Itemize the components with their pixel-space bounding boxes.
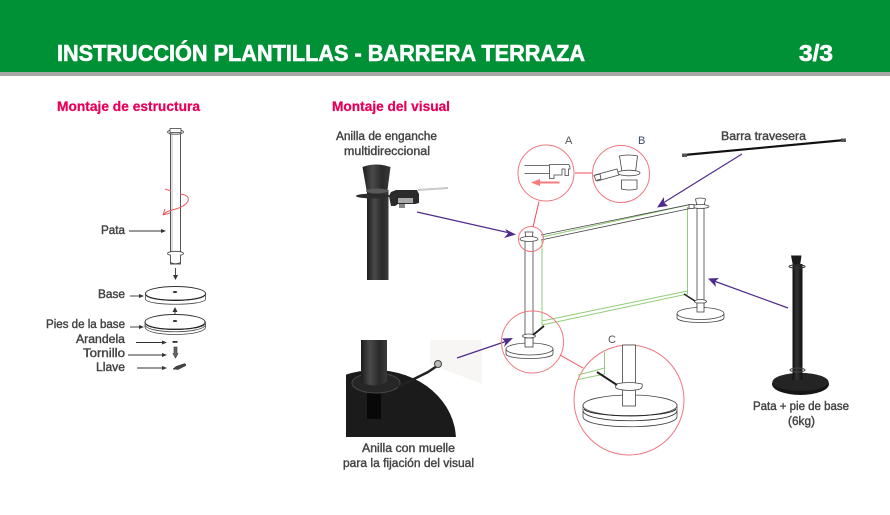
base foot [145, 314, 206, 334]
detail B [592, 135, 650, 202]
label: anilla con muelle: Anilla con muelle [362, 443, 455, 455]
visual panel outline [542, 205, 688, 325]
label: pata [101, 225, 166, 237]
arrow: base foot up [172, 307, 178, 325]
heading: montaje de estructura: Montaje de estructura [57, 98, 200, 114]
arrow: barra travesera to diagram [657, 154, 742, 208]
label: anilla con muelle: para la fijación del visual [343, 458, 474, 470]
panel: exploded structure diagram [145, 128, 206, 370]
detail C [574, 334, 684, 455]
labels: structure parts [46, 225, 167, 374]
left spring [533, 326, 544, 335]
label: tornillo [83, 348, 167, 360]
label: arandela: Arandela [76, 334, 126, 346]
wrench [173, 364, 186, 370]
header band [0, 0, 890, 76]
label: llave: Llave [96, 362, 125, 374]
label: anilla de enganche [336, 131, 437, 158]
right spring [684, 294, 695, 301]
screw [173, 347, 178, 358]
page number: 3/3 [799, 40, 833, 66]
right pole [689, 198, 709, 312]
detail A [518, 135, 574, 201]
photo: pole with base [772, 256, 829, 395]
crossbar [541, 204, 690, 240]
label: base [98, 289, 144, 301]
arrow: anilla de enganche to diagram [417, 212, 516, 238]
base [146, 286, 206, 304]
highlight circle top [518, 226, 544, 252]
panel: assembled barrier diagram [502, 173, 724, 373]
label: pata + pie de base: (6kg) [788, 416, 815, 428]
label: pies de la base: Pies de la base [46, 319, 125, 331]
label: base: Base [98, 289, 125, 301]
pole [168, 128, 184, 264]
label: pata + pie de base: Pata + pie de base [753, 401, 849, 413]
washer [172, 341, 178, 343]
label: pata + pie de base [753, 401, 849, 428]
right base [677, 303, 724, 322]
highlight circle bottom [502, 311, 564, 373]
label: pata: Pata [101, 225, 126, 237]
label: llave [96, 362, 167, 374]
label: anilla de enganche: multidireccional [344, 146, 430, 158]
arrow: pata + pie to diagram [708, 278, 788, 308]
label: barra travesera: Barra travesera [721, 131, 807, 143]
label: tornillo: Tornillo [83, 348, 125, 360]
heading: montaje del visual: Montaje del visual [332, 98, 450, 114]
left base [506, 338, 553, 358]
label: arandela [76, 334, 167, 346]
label C: C [608, 334, 616, 346]
photo: crossbar [682, 138, 846, 157]
photo: base with spring ring [346, 340, 482, 437]
label B: B [638, 135, 645, 147]
rotation arrow [163, 189, 188, 215]
label: anilla con muelle [343, 443, 474, 470]
arrow: pole down [173, 268, 178, 280]
label A: A [565, 135, 573, 147]
connector lines [533, 173, 592, 368]
title: INSTRUCCIÓN PLANTILLAS - BARRERA TERRAZA [57, 39, 585, 66]
label: anilla de enganche: Anilla de enganche [336, 131, 437, 143]
photo: top ring on pole [356, 164, 448, 280]
arrow: anilla con muelle to diagram [457, 338, 513, 358]
left pole [520, 232, 538, 347]
